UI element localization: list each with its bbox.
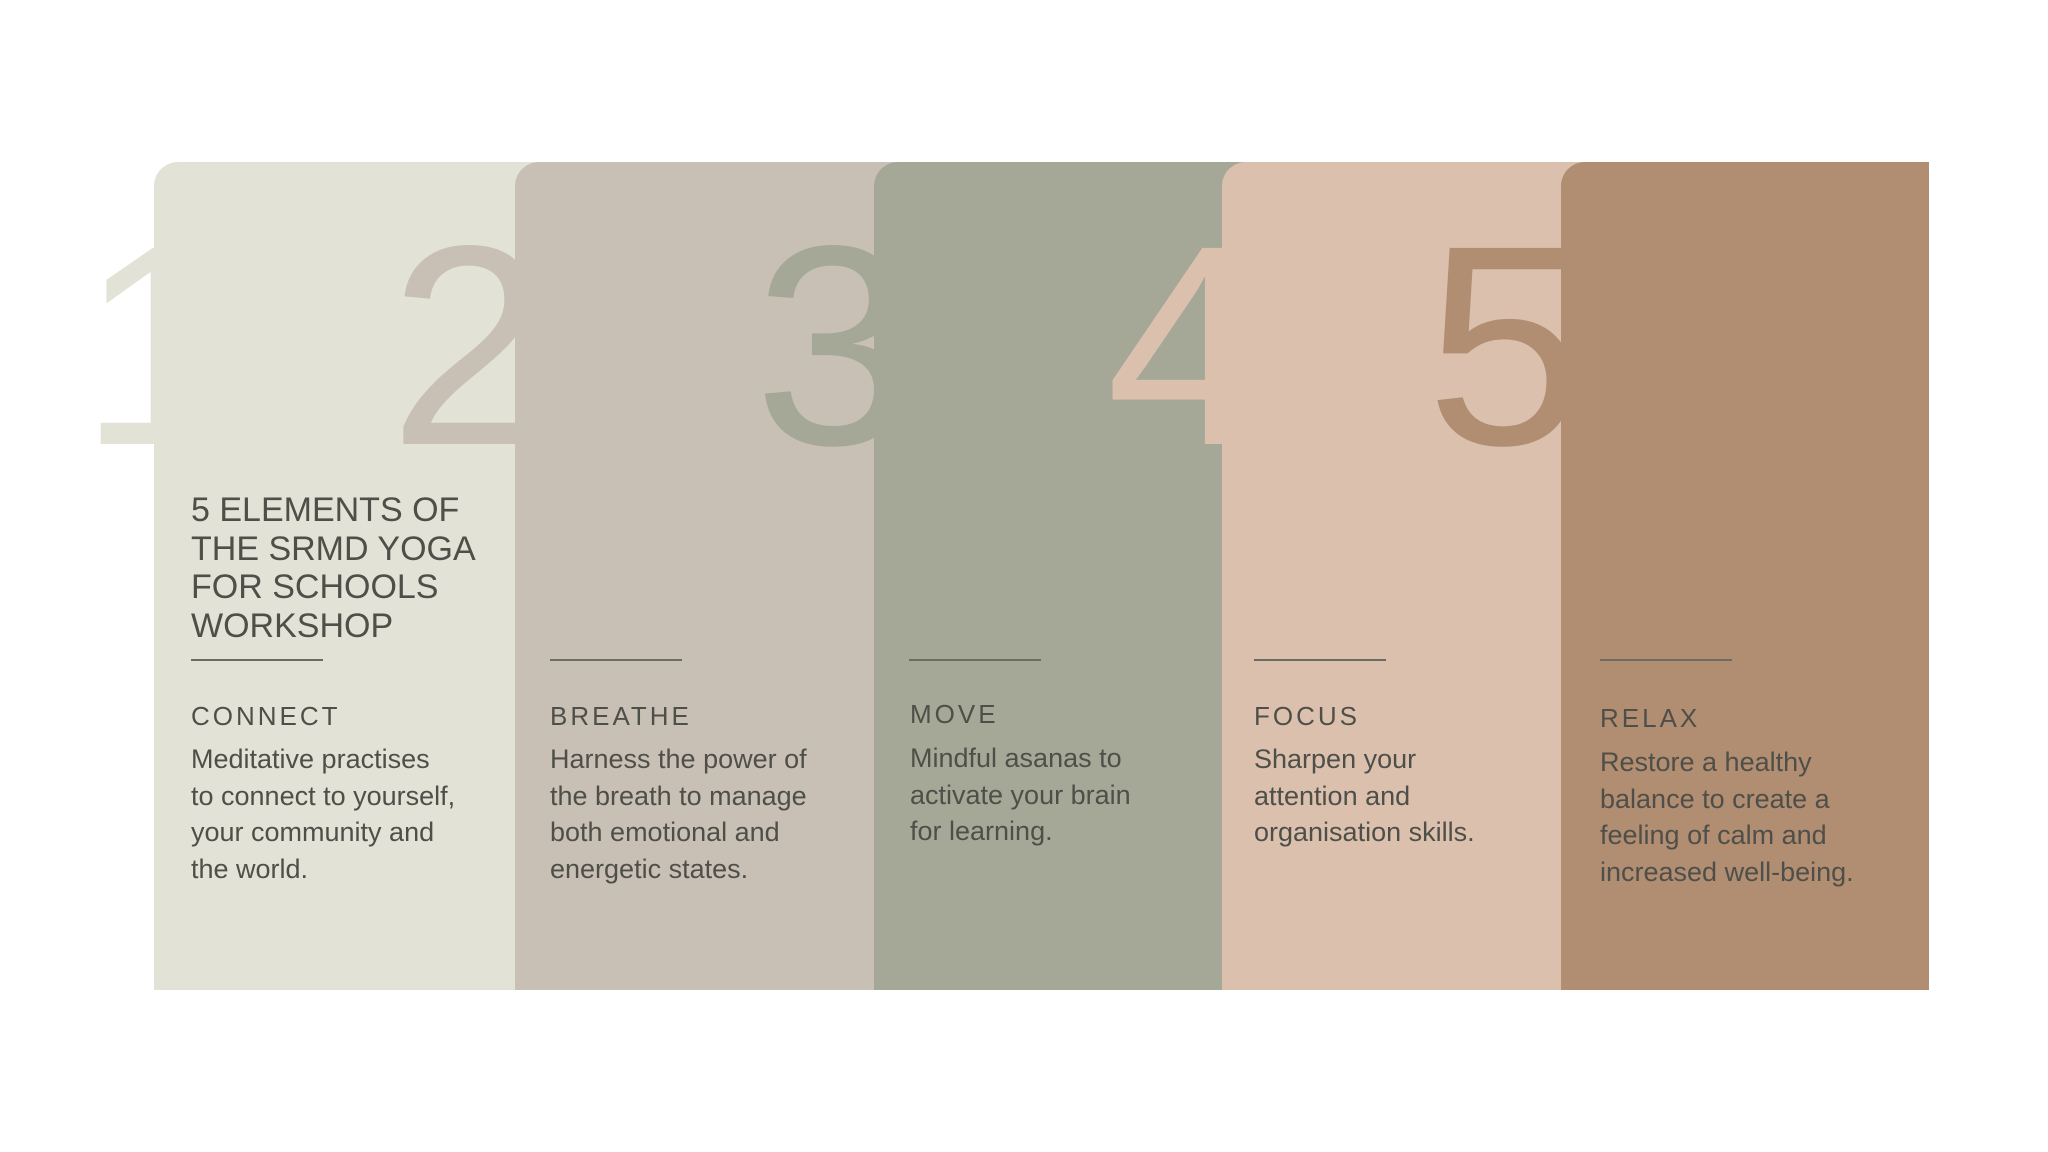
- text: relax: balance to create a: [1600, 784, 1830, 814]
- text: relax: [1600, 747, 1854, 887]
- text: connect: the world.: [191, 854, 308, 884]
- title: 5 ELEMENTS OF: [191, 491, 459, 529]
- heading: connect: CONNECT: [191, 701, 341, 731]
- text: focus: attention and: [1254, 781, 1410, 811]
- divider connect: [191, 659, 323, 661]
- text: focus: organisation skills.: [1254, 817, 1475, 847]
- heading: focus: FOCUS: [1254, 701, 1360, 731]
- text: focus: Sharpen your: [1254, 744, 1416, 774]
- digit 5: 5: [1426, 187, 1585, 505]
- text: move: Mindful asanas to: [910, 743, 1122, 773]
- digit 4: 4: [1106, 187, 1265, 505]
- panel: focus: [1222, 162, 1622, 990]
- title: THE SRMD YOGA: [191, 530, 476, 568]
- text: breathe: energetic states.: [550, 854, 748, 884]
- text: breathe: Harness the power of: [550, 744, 807, 774]
- text: relax: feeling of calm and: [1600, 820, 1827, 850]
- text: connect: your community and: [191, 817, 434, 847]
- divider relax: [1600, 659, 1732, 661]
- digit 3: 3: [754, 187, 913, 505]
- text: breathe: both emotional and: [550, 817, 780, 847]
- text: connect: [191, 744, 455, 884]
- text: breathe: the breath to manage: [550, 781, 807, 811]
- panel: connect: [154, 162, 554, 990]
- heading: move: MOVE: [910, 699, 999, 729]
- text: focus: [1254, 744, 1475, 847]
- text: connect: to connect to yourself,: [191, 781, 455, 811]
- title: WORKSHOP: [191, 606, 393, 644]
- text: connect: Meditative practises: [191, 744, 430, 774]
- text: move: activate your brain: [910, 780, 1131, 810]
- text: move: [910, 743, 1131, 846]
- heading: breathe: BREATHE: [550, 701, 692, 731]
- title: [191, 491, 476, 644]
- divider move: [909, 659, 1041, 661]
- panel: relax: [1561, 162, 1929, 990]
- digit 2: 2: [389, 187, 548, 505]
- heading: relax: RELAX: [1600, 703, 1700, 733]
- text: relax: increased well-being.: [1600, 857, 1854, 887]
- panel: breathe: [515, 162, 915, 990]
- digit 1: 1: [79, 187, 238, 505]
- text: relax: Restore a healthy: [1600, 747, 1812, 777]
- panel: move: [874, 162, 1274, 990]
- title: FOR SCHOOLS: [191, 568, 438, 606]
- text: breathe: [550, 744, 807, 884]
- text: move: for learning.: [910, 816, 1053, 846]
- divider breathe: [550, 659, 682, 661]
- divider focus: [1254, 659, 1386, 661]
